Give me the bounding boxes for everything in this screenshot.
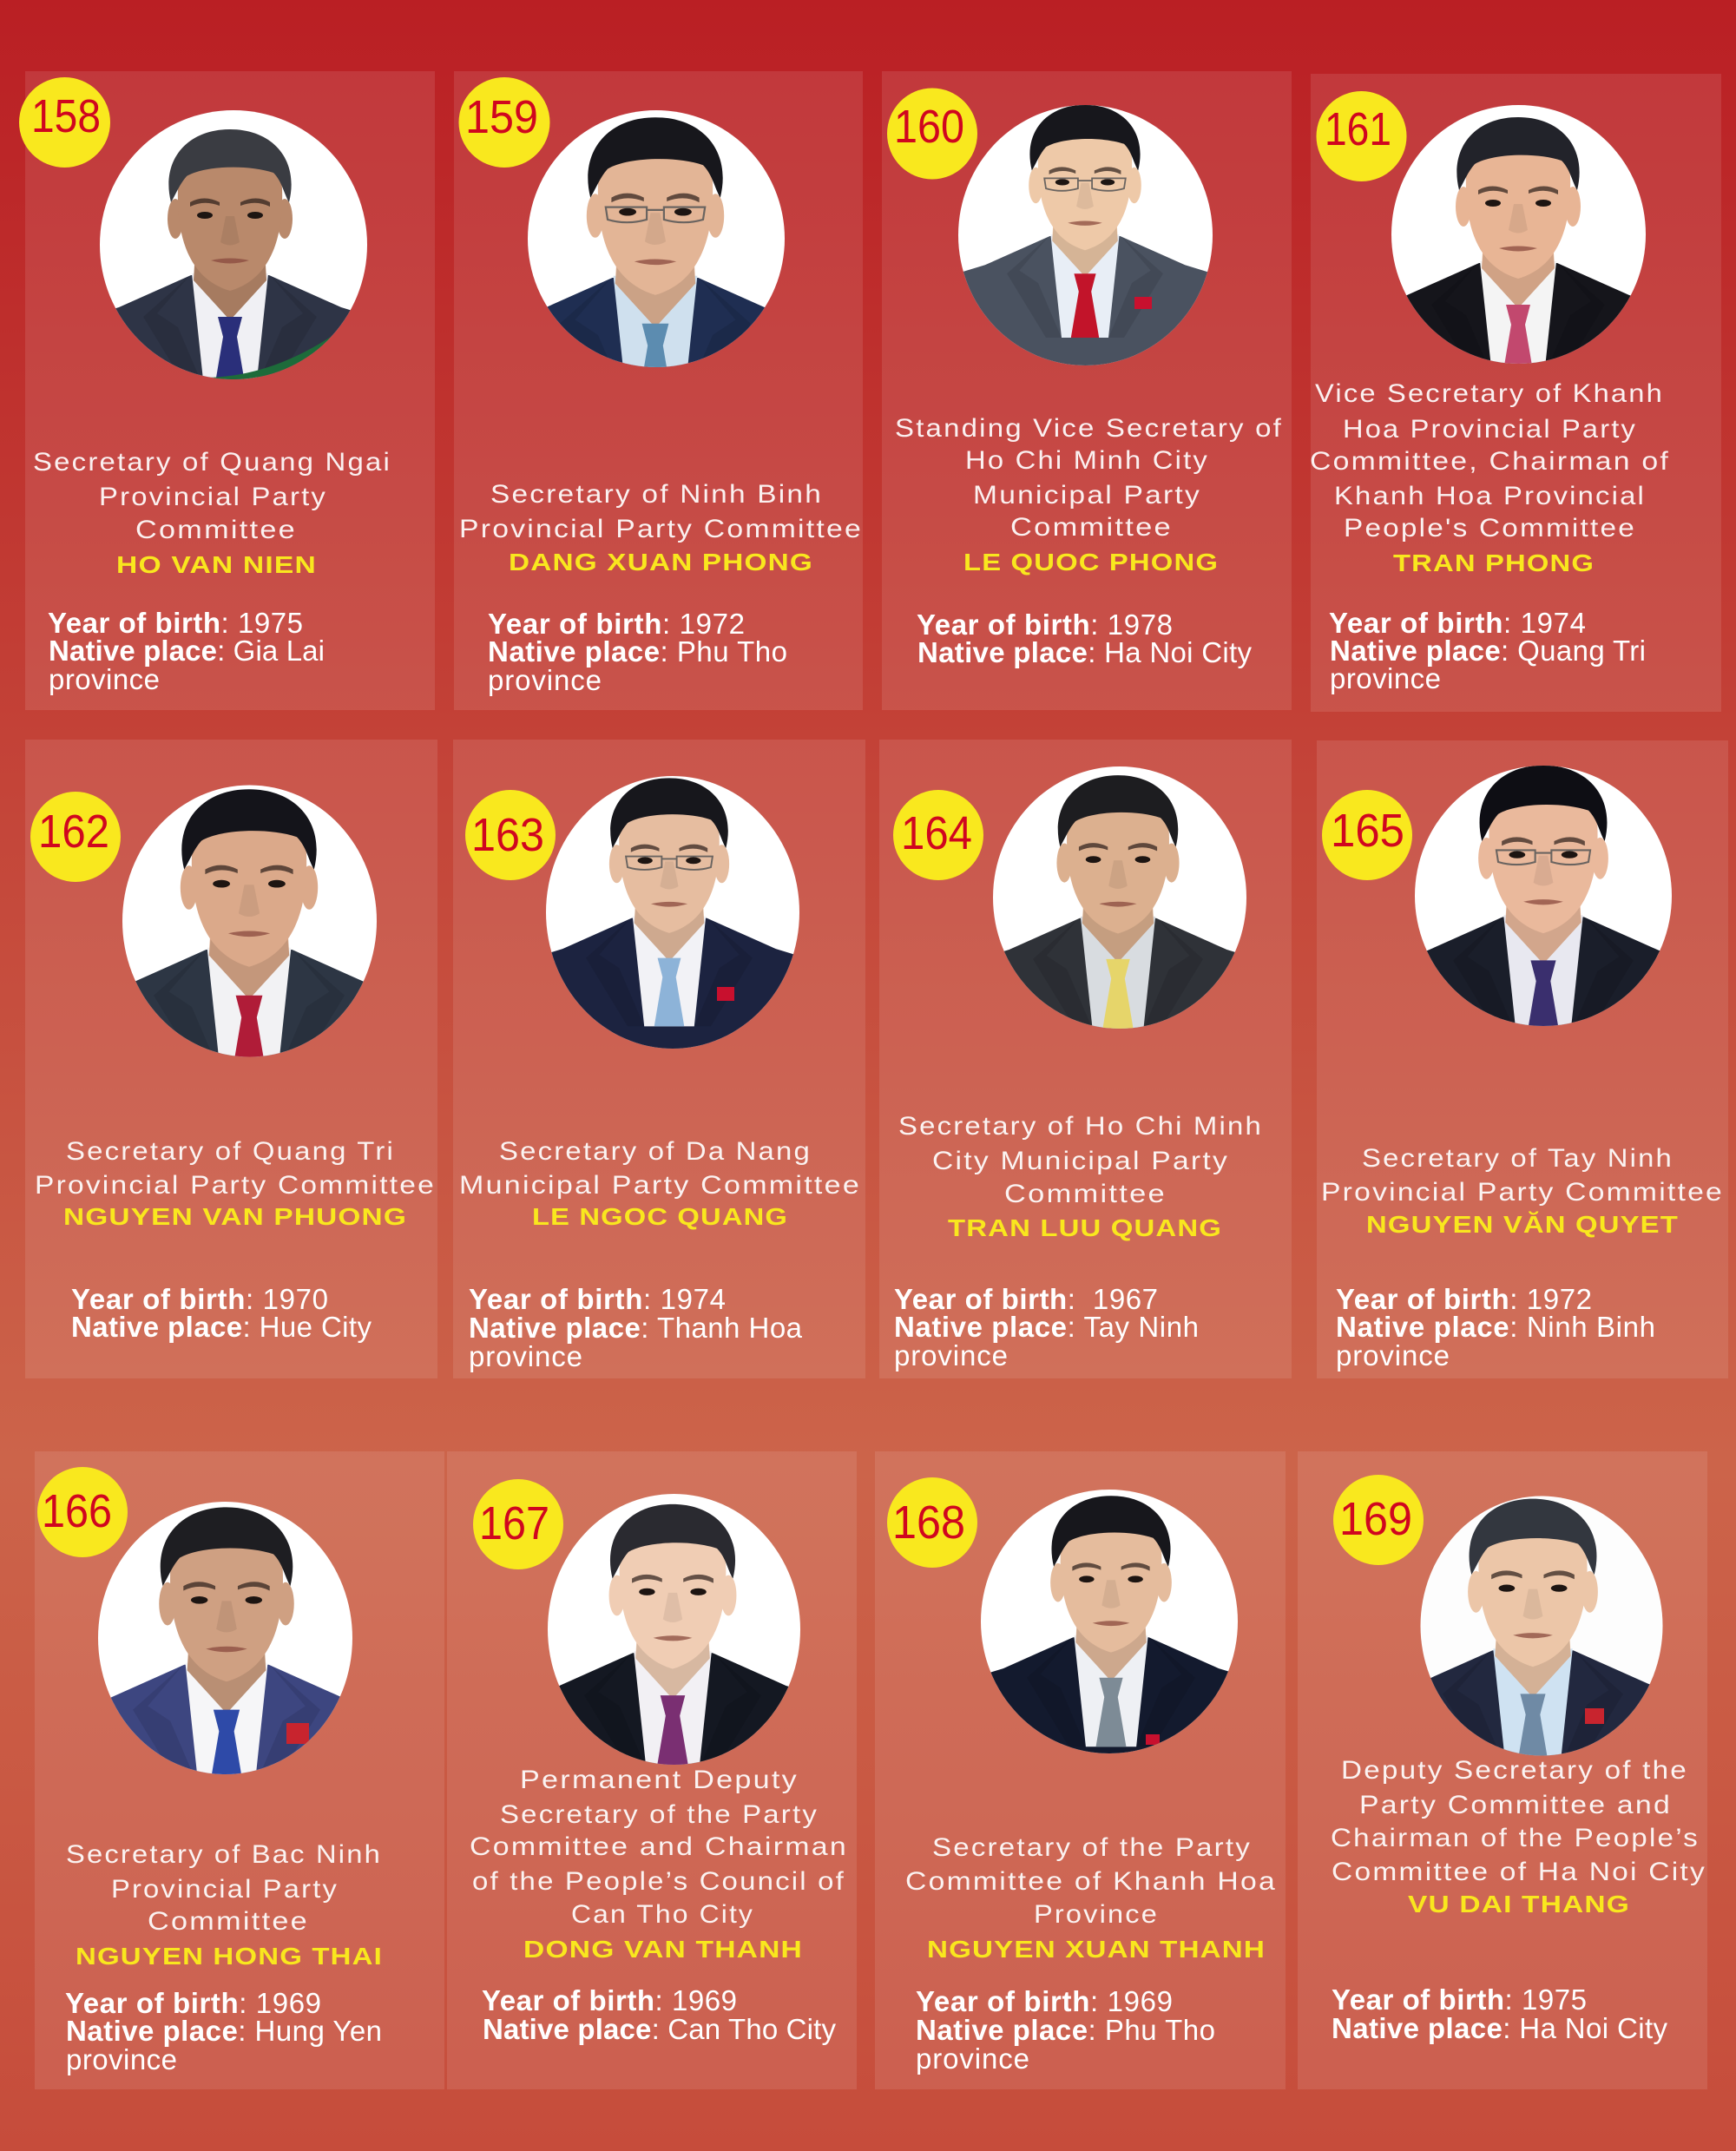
badge: number 169: 169 (1339, 1493, 1412, 1545)
panel: 164 Tran Luu Quang (879, 740, 1305, 1378)
name: LE QUOC PHONG (963, 549, 1219, 576)
position title: Vice Secretary of Khanh (1315, 379, 1664, 408)
badge: number 161: 161 (1325, 103, 1391, 155)
details: province (66, 2043, 177, 2075)
details: Native place: Phu Tho (916, 2014, 1215, 2046)
portrait: Vu Dai Thang (1420, 1496, 1663, 1755)
panel: 168 Nguyen Xuan Thanh (875, 1451, 1296, 2089)
badge: number 164: 164 (901, 807, 972, 859)
details: Year of birth: 1969 (482, 1984, 737, 2016)
badge: number 167 (473, 1479, 563, 1569)
details (482, 1984, 837, 2045)
details: Native place: Tay Ninh (894, 1311, 1199, 1343)
badge: number 159 (458, 77, 550, 168)
details (469, 1283, 803, 1372)
details: Year of birth: 1967 (894, 1283, 1158, 1315)
position title (459, 1137, 861, 1200)
position title: Party Committee and (1359, 1791, 1672, 1819)
details (1332, 1983, 1668, 2044)
details: Native place: Hung Yen (66, 2015, 382, 2047)
panel: 165 Nguyen Van Quyet (1317, 740, 1736, 1378)
details (917, 608, 1252, 668)
name: LE NGOC QUANG (532, 1203, 788, 1230)
details (65, 1987, 382, 2075)
details: Native place: Gia Lai (49, 635, 325, 667)
position title (1310, 379, 1670, 543)
details: Year of birth: 1969 (916, 1985, 1173, 2017)
position title: Committee and Chairman (470, 1832, 848, 1861)
panel: 158 Ho Van Nien (19, 71, 435, 710)
position title: Chairman of the People’s (1331, 1824, 1700, 1852)
position title (898, 1112, 1263, 1208)
card background (454, 71, 863, 710)
details: province (1336, 1339, 1450, 1372)
portrait: Nguyen Hong Thai (98, 1502, 352, 1774)
position title: Can Tho City (571, 1900, 754, 1929)
position title: Committee (1004, 1180, 1167, 1208)
panel: 169 Vu Dai Thang (1298, 1451, 1732, 2089)
position title: Secretary of Da Nang (499, 1137, 812, 1166)
position title: Province (1034, 1900, 1159, 1929)
position title: Provincial Party Committee (1321, 1178, 1724, 1207)
details (48, 607, 325, 695)
details: Year of birth: 1974 (1329, 607, 1586, 639)
details: Native place: Can Tho City (483, 2013, 837, 2045)
details: Native place: Quang Tri (1330, 635, 1646, 667)
position title (35, 1137, 436, 1200)
badge: number 165: 165 (1331, 805, 1404, 857)
details: Native place: Phu Tho (488, 635, 787, 668)
position title: Provincial Party Committee (459, 515, 863, 543)
card background (453, 740, 865, 1378)
portrait: Ho Van Nien (100, 110, 367, 379)
name: TRAN PHONG (1393, 549, 1595, 576)
position title: Secretary of Ho Chi Minh (898, 1112, 1263, 1141)
details (488, 608, 787, 696)
details: Native place: Ha Noi City (1332, 2012, 1668, 2044)
badge: number 159: 159 (465, 91, 538, 143)
card background (882, 71, 1292, 710)
details (894, 1283, 1199, 1372)
details: province (916, 2042, 1029, 2075)
badge: number 168: 168 (892, 1496, 965, 1549)
card background (35, 1451, 444, 2089)
badge: number 165 (1322, 790, 1412, 880)
portrait: Nguyen Van Quyet (1415, 766, 1672, 1026)
position title: Committee of Khanh Hoa (905, 1867, 1277, 1896)
name: DONG VAN THANH (523, 1936, 803, 1963)
position title: Municipal Party (973, 481, 1201, 510)
details (1329, 607, 1646, 694)
position title: Provincial Party (99, 483, 327, 511)
details (1336, 1283, 1655, 1372)
badge: number 161 (1316, 91, 1406, 181)
position title: Committee, Chairman of (1310, 447, 1670, 476)
position title (470, 1766, 848, 1929)
portrait: Le Ngoc Quang (546, 776, 799, 1049)
badge: number 168 (887, 1477, 977, 1568)
card background (1311, 74, 1721, 712)
name: HO VAN NIEN (116, 551, 317, 578)
position title: Committee of Ha Noi City (1332, 1858, 1706, 1886)
card background (1298, 1451, 1707, 2089)
position title: Deputy Secretary of the (1341, 1756, 1688, 1785)
position title: Provincial Party Committee (35, 1171, 436, 1200)
position title (459, 480, 863, 543)
details (71, 1283, 372, 1343)
details: Year of birth: 1972 (1336, 1283, 1592, 1315)
portrait: Dang Xuan Phong (528, 110, 785, 367)
position title: Standing Vice Secretary of (895, 414, 1283, 443)
name: DANG XUAN PHONG (509, 549, 813, 576)
panel: 159 Dang Xuan Phong (445, 71, 865, 710)
badge: number 158 (19, 77, 110, 168)
position title (1321, 1144, 1724, 1207)
badge: number 162: 162 (38, 806, 109, 858)
position title: Ho Chi Minh City (965, 446, 1209, 475)
position title: Hoa Provincial Party (1343, 415, 1637, 444)
details: Year of birth: 1969 (65, 1987, 321, 2019)
panel: 160 Le Quoc Phong (882, 71, 1292, 710)
details: province (894, 1339, 1008, 1372)
position title (905, 1833, 1277, 1929)
badge: number 167: 167 (479, 1497, 549, 1549)
card background (879, 740, 1292, 1378)
portrait: Tran Luu Quang (993, 766, 1246, 1029)
card background (1317, 740, 1728, 1378)
name: NGUYEN VAN PHUONG (63, 1203, 407, 1230)
details: province (469, 1340, 582, 1372)
details: Native place: Thanh Hoa (469, 1312, 803, 1344)
position title: Secretary of Ninh Binh (490, 480, 823, 509)
position title: Khanh Hoa Provincial (1334, 482, 1646, 510)
name: NGUYEN VĂN QUYET (1366, 1211, 1679, 1238)
details: Year of birth: 1975 (1332, 1983, 1587, 2016)
position title: Secretary of the Party (500, 1800, 819, 1829)
details: province (49, 663, 160, 695)
position title: of the People’s Council of (472, 1867, 845, 1896)
panel: 167 Dong Van Thanh (447, 1451, 867, 2089)
details (916, 1985, 1215, 2075)
badge: number 162 (30, 792, 121, 882)
details: Year of birth: 1974 (469, 1283, 726, 1315)
card background (447, 1451, 857, 2089)
portrait: Nguyen Van Phuong (122, 785, 377, 1057)
position title: City Municipal Party (932, 1147, 1229, 1175)
position title: Provincial Party (111, 1875, 339, 1904)
badge: number 166: 166 (42, 1485, 112, 1537)
badge: number 158: 158 (31, 90, 101, 142)
position title: Secretary of Quang Ngai (33, 448, 391, 477)
portrait: Le Quoc Phong (958, 105, 1213, 365)
badge: number 166 (37, 1467, 128, 1557)
details: Year of birth: 1975 (48, 607, 303, 639)
name: TRAN LUU QUANG (948, 1214, 1222, 1241)
details: Year of birth: 1970 (71, 1283, 328, 1315)
position title (66, 1840, 382, 1936)
position title: Committee (135, 516, 297, 544)
position title (33, 448, 391, 544)
name: VU DAI THANG (1408, 1891, 1630, 1917)
badge: number 160: 160 (894, 101, 964, 153)
card background (25, 71, 435, 710)
position title (1331, 1756, 1706, 1886)
details: Native place: Hue City (71, 1311, 372, 1343)
position title: Committee (1010, 513, 1173, 542)
position title: Secretary of Quang Tri (66, 1137, 395, 1166)
badge: number 160 (887, 89, 977, 179)
position title: Secretary of Tay Ninh (1362, 1144, 1674, 1173)
panel: 161 Tran Phong (1310, 74, 1721, 712)
panel: 163 Le Ngoc Quang (453, 740, 865, 1378)
position title: Permanent Deputy (520, 1766, 799, 1794)
card background (875, 1451, 1286, 2089)
details: province (488, 664, 602, 696)
panel: 162 Nguyen Van Phuong (25, 740, 459, 1378)
position title: Secretary of the Party (932, 1833, 1252, 1862)
details: Year of birth: 1972 (488, 608, 745, 640)
position title: Municipal Party Committee (459, 1171, 861, 1200)
position title: Committee (148, 1907, 309, 1936)
details: Year of birth: 1978 (917, 608, 1173, 641)
badge: number 164 (893, 790, 983, 880)
badge: number 163: 163 (471, 809, 544, 861)
name: NGUYEN XUAN THANH (927, 1936, 1266, 1963)
panel: 166 Nguyen Hong Thai (20, 1451, 444, 2089)
card background (25, 740, 437, 1378)
details: province (1330, 662, 1441, 694)
position title: Secretary of Bac Ninh (66, 1840, 382, 1869)
name: NGUYEN HONG THAI (76, 1943, 383, 1970)
position title: People's Committee (1344, 514, 1636, 543)
badge: number 169 (1333, 1475, 1424, 1565)
portrait: Dong Van Thanh (548, 1494, 800, 1765)
details: Native place: Ha Noi City (917, 636, 1252, 668)
position title (895, 414, 1283, 542)
portrait: Nguyen Xuan Thanh (981, 1490, 1238, 1753)
portrait: Tran Phong (1391, 105, 1646, 364)
badge: number 163 (465, 790, 556, 880)
details: Native place: Ninh Binh (1336, 1311, 1655, 1343)
